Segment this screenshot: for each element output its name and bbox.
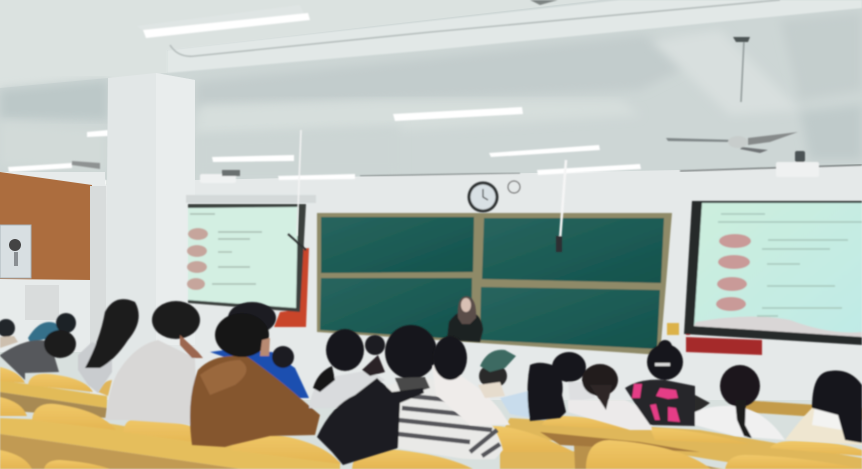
student: far left: [0, 319, 18, 348]
student: brown hoodie: [190, 313, 320, 447]
student: back-left head: [56, 313, 76, 333]
students right section: [432, 336, 862, 445]
student: striped shirt with backpack: [317, 325, 503, 465]
front beam with pipe: [167, 0, 862, 73]
student: cream coat long hair: [785, 371, 862, 445]
student: curly hair white coat: [432, 336, 510, 425]
hanging cables: [288, 130, 566, 252]
student: light blue top: [500, 390, 532, 418]
ceiling lights: [8, 5, 641, 186]
wall clock: [468, 181, 520, 212]
student: white hoodie: [105, 301, 203, 425]
ceiling: [0, 0, 862, 180]
student: green cap: [478, 350, 516, 398]
student: white top ponytail: [568, 364, 652, 430]
student: back row head: [552, 352, 586, 382]
right projection screen: [667, 201, 862, 355]
chalkboard: [317, 213, 672, 355]
back wall: [90, 165, 862, 400]
student: long hair girl: [78, 299, 139, 393]
students left section: [0, 299, 503, 465]
left side wall: [0, 172, 105, 352]
student: ponytail girl: [309, 329, 385, 408]
student: dark long hair: [528, 363, 566, 421]
column: [90, 73, 195, 400]
student: behind brown hoodie: [210, 302, 309, 398]
student: blue hoodie: [28, 322, 66, 342]
student: pink pattern vest: [625, 340, 710, 426]
presenter: [447, 296, 483, 342]
ceiling fan and projector: [72, 37, 819, 183]
desks and chairs: [0, 367, 862, 469]
student: braided hair girl: [695, 365, 785, 440]
student: grey jumper: [0, 340, 59, 380]
student: head: [44, 330, 76, 358]
left projection screen: [186, 195, 316, 327]
